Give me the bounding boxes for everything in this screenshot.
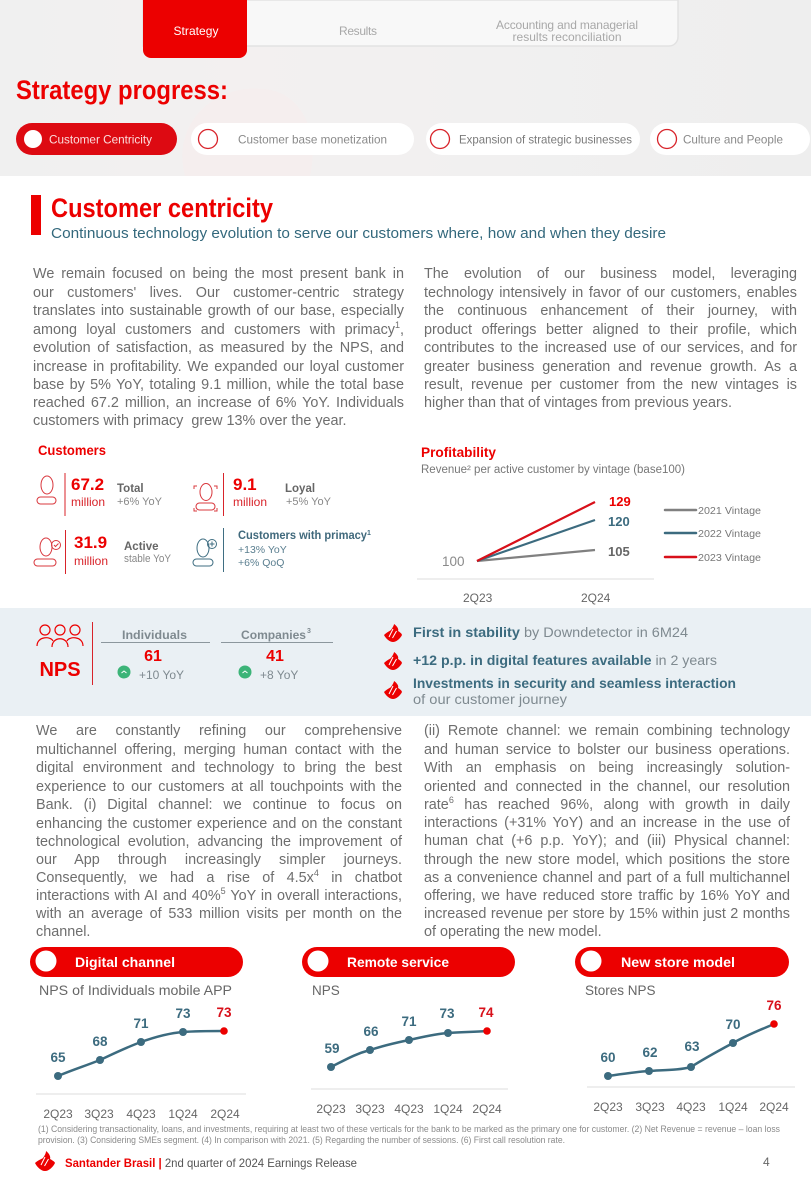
navigation tabs: Results	[339, 24, 377, 38]
icon: person active	[34, 538, 60, 566]
pill: customer base monetization	[191, 123, 414, 155]
page number: 4	[763, 1155, 770, 1169]
text block: intro left column	[33, 266, 404, 429]
line chart: 60	[600, 1050, 616, 1065]
line chart: vintages: 105	[608, 544, 630, 559]
text block: channels left column: channel.	[36, 924, 90, 940]
line chart: vintages: 2Q24	[581, 591, 611, 605]
text block: channels left column: multichannel offering, merging human contact with the	[36, 742, 402, 758]
highlight: security: of our customer journey	[413, 692, 567, 707]
text block: intro right column: The evolution of our business model, leveraging	[424, 266, 797, 282]
header pill	[302, 947, 515, 977]
legend: 2022 Vintage	[698, 528, 761, 540]
highlight: stability: First in stability by Downdetector in 6M24	[413, 625, 689, 640]
footnotes	[38, 1124, 780, 1146]
line chart: 3Q23	[635, 1100, 665, 1114]
text block: intro left column: among loyal customers and customers with primacy1,	[33, 320, 404, 338]
stat: companies: 41	[266, 648, 284, 665]
icon: person total	[37, 476, 56, 504]
pill: customer base monetization: Customer base monetization	[238, 132, 387, 146]
stat: loyal	[223, 473, 332, 516]
text block: channels right column: as a convenience channel and part of a full multichannel	[424, 870, 790, 886]
line chart: 2Q23	[43, 1107, 73, 1121]
pill: customer centricity: Customer Centricity	[49, 132, 152, 146]
text block: intro right column: the continuous enhancement of their journey, with	[424, 303, 797, 319]
panel: digital channel: NPS of Individuals mobile APP	[39, 983, 232, 998]
line chart: 2Q24	[472, 1102, 502, 1116]
header pill: Digital channel	[75, 954, 175, 970]
text block: intro right column	[424, 266, 797, 411]
panel: profitability: Profitability	[421, 444, 496, 460]
text block: channels left column: our App through increasingly simpler journeys.	[36, 852, 402, 868]
pill: customer centricity	[16, 123, 177, 155]
stat: individuals: 61	[144, 648, 162, 665]
stat: total: 67.2	[71, 475, 104, 494]
text block: intro right column: greater business generation and revenue growth. As a	[424, 359, 797, 375]
active tab: strategy: Strategy	[174, 24, 218, 38]
text block: channels right column: rate6 has reached 96%, along with growth in daily	[424, 795, 790, 813]
text block: channels right column: and human service to bolster our business operations.	[424, 742, 790, 758]
stat: total	[64, 473, 163, 516]
text block: channels left column: technological evolution, advancing the improvement of	[36, 834, 402, 850]
stat: active: Active	[124, 541, 159, 553]
stat: active: million	[74, 554, 108, 568]
text block: intro left column: We remain focused on being the most present bank in	[33, 266, 404, 282]
stat: loyal: 9.1	[233, 475, 257, 494]
line chart: vintages	[417, 494, 654, 605]
line chart: 4Q23	[676, 1100, 706, 1114]
text block: intro right column: result, revenue per customer from the new vintages is	[424, 377, 797, 393]
stat: customers with primacy: +13% YoY	[238, 544, 287, 556]
panel: new store model	[575, 947, 795, 1114]
line chart: 66	[363, 1024, 379, 1039]
line chart: 73	[439, 1006, 455, 1021]
line chart: 63	[684, 1039, 700, 1054]
line chart: 65	[50, 1050, 66, 1065]
text block: intro left column: reached 67.2 million, an increase of 6% YoY. Individuals	[33, 395, 404, 411]
header pill	[30, 947, 243, 977]
text block: channels right column	[424, 723, 790, 940]
highlight: security	[413, 676, 736, 707]
footnotes: provision. (3) Considering SMEs segment. (4) In comparison with 2021. (5) Regarding the number of sessions. (6) First call resolution rate.	[38, 1135, 565, 1146]
text block: channels right column: human chat (+6 p.p. YoY); and (iii) Physical channel:	[424, 833, 790, 849]
navigation tabs: Accounting and managerial	[496, 18, 638, 32]
line chart: 74	[478, 1005, 494, 1020]
section heading: customer centricity: Continuous technology evolution to serve our customers where, how and when they desire	[51, 225, 666, 242]
stat: loyal: Loyal	[285, 483, 315, 495]
line chart: 1Q24	[433, 1102, 463, 1116]
legend: 2023 Vintage	[698, 552, 761, 564]
panel: digital channel	[30, 947, 246, 1121]
line chart: 3Q23	[84, 1107, 114, 1121]
text block: intro right column: higher than that of vintages from previous years.	[424, 395, 732, 411]
panel: customers: Customers	[38, 443, 106, 458]
text block: intro left column: evolution of satisfaction, as measured by the NPS, and	[33, 340, 404, 356]
line chart: 73	[216, 1005, 232, 1020]
footer logo and release title	[35, 1151, 357, 1171]
stat: total: Total	[117, 483, 144, 495]
line chart: 76	[766, 998, 782, 1013]
line chart: 73	[175, 1006, 191, 1021]
stat: individuals: +10 YoY	[139, 668, 184, 682]
label: NPS: NPS	[39, 659, 81, 681]
line chart: 2Q24	[210, 1107, 240, 1121]
line chart: 1Q24	[718, 1100, 748, 1114]
text block: channels left column: with an average of 533 million visits per month on the	[36, 906, 402, 922]
line chart: 68	[92, 1034, 108, 1049]
legend	[665, 505, 761, 564]
line chart: 70	[725, 1017, 741, 1032]
text block: intro right column: contributes to the increased use of our services, and for	[424, 340, 797, 356]
panel: remote service	[302, 947, 515, 1116]
line chart: vintages: 120	[608, 514, 630, 529]
line chart: vintages: 100	[442, 554, 465, 569]
header pill: New store model	[621, 954, 735, 970]
text block: intro right column: technology intensively in favor of our customers, enables	[424, 285, 797, 301]
stat: individuals	[101, 628, 210, 682]
stat: individuals: Individuals	[122, 628, 187, 642]
stat: loyal: million	[233, 495, 267, 509]
stat: active: stable YoY	[124, 553, 172, 565]
line chart: vintages: 129	[609, 494, 631, 509]
line chart: 2Q23	[593, 1100, 623, 1114]
text block: intro left column: customers with primacy grew 13% over the year.	[33, 413, 347, 429]
line chart: 3Q23	[355, 1102, 385, 1116]
section heading: customer centricity: Customer centricity	[51, 193, 273, 223]
text block: intro left column: translates into sustainable growth of our base, especially	[33, 303, 404, 319]
line chart: 71	[133, 1016, 149, 1031]
stat: customers with primacy: Customers with primacy	[238, 530, 368, 542]
pill: expansion of strategic businesses	[426, 123, 640, 155]
icon: flame 1	[384, 624, 402, 642]
line chart	[36, 1005, 246, 1121]
line chart	[587, 998, 795, 1114]
icon: person primacy	[193, 539, 216, 566]
stat: companies: +8 YoY	[260, 668, 298, 682]
text block: channels left column	[36, 723, 402, 940]
text block: channels right column: through the new store model, which positions the store	[424, 852, 790, 868]
active tab: strategy	[143, 0, 247, 58]
panel: NPS band	[0, 608, 811, 716]
pill: expansion of strategic businesses: Expansion of strategic businesses	[459, 132, 632, 146]
section heading: customer centricity	[31, 193, 666, 242]
stat: total: million	[71, 495, 105, 509]
header pill: Remote service	[347, 954, 449, 970]
stat: customers with primacy: 1	[367, 530, 371, 537]
navigation tabs	[143, 0, 678, 58]
line chart: 71	[401, 1014, 417, 1029]
highlight: security: Investments in security and seamless interaction	[413, 676, 736, 691]
text block: channels left column: interactions with AI and 40%5 YoY in overall interactions,	[36, 886, 402, 904]
text block: channels right column: of operating the new model.	[424, 924, 602, 940]
stat: customers with primacy: +6% QoQ	[238, 557, 284, 569]
text block: channels left column: Consequently, we had a rise of 4.5x4 in chatbot	[36, 868, 402, 886]
legend: 2021 Vintage	[698, 505, 761, 517]
icon: flame 2	[384, 652, 402, 670]
panel: new store model: Stores NPS	[585, 983, 656, 998]
text block: channels left column: digital environment and technology to bring the best	[36, 760, 402, 776]
text block: channels left column: Bank. (i) Digital channel: we continue to focus on	[36, 797, 402, 813]
line chart: 1Q24	[168, 1107, 198, 1121]
stat: loyal: +5% YoY	[286, 496, 332, 508]
stat: active: 31.9	[74, 533, 107, 552]
stat: companies	[221, 628, 333, 682]
page heading: Strategy progress:	[16, 75, 228, 105]
text block: intro right column: product offerings better aligned to their profile, which	[424, 322, 797, 338]
panel: customers	[34, 443, 371, 574]
text block: channels right column: offering, we have reduced store traffic by 16% YoY and	[424, 888, 790, 904]
text block: channels right column: (ii) Remote channel: we remain combining technology	[424, 723, 790, 739]
line chart: 2Q24	[759, 1100, 789, 1114]
line chart: 62	[642, 1045, 658, 1060]
navigation tabs: results reconciliation	[512, 30, 622, 44]
icon: person loyal	[194, 484, 217, 511]
stat: total: +6% YoY	[117, 496, 163, 508]
text block: channels right column: increased revenue per store by 15% within just 2 months	[424, 906, 790, 922]
line chart: vintages: 2Q23	[463, 591, 493, 605]
panel: profitability: Revenue² per active customer by vintage (base100)	[421, 464, 685, 476]
stat: customers with primacy	[223, 528, 371, 572]
stat: companies: Companies	[241, 628, 306, 642]
footer logo and release title: Santander Brasil | 2nd quarter of 2024 Earnings Release	[65, 1156, 357, 1170]
text block: intro left column: our customers' lives. Our customer-centric strategy	[33, 285, 404, 301]
line chart: 59	[324, 1041, 340, 1056]
line chart: 4Q23	[394, 1102, 424, 1116]
icon: group of people	[37, 625, 83, 647]
panel: remote service: NPS	[312, 983, 340, 998]
panel: profitability	[417, 444, 761, 605]
text block: channels right column: interactions (+31% YoY) and an increase in the use of	[424, 815, 790, 831]
pill: culture and people: Culture and People	[683, 132, 783, 146]
line chart	[311, 1005, 508, 1116]
pill: culture and people	[650, 123, 810, 155]
stat: companies: 3	[307, 628, 311, 635]
text block: channels left column: We are constantly refining our comprehensive	[36, 723, 402, 739]
stat: active	[65, 530, 172, 574]
header background	[0, 0, 811, 176]
header pill	[575, 947, 789, 977]
text block: intro left column: base by 5% YoY, totaling 9.1 million, while the total base	[33, 377, 404, 393]
text block: channels left column: experience to our customers at all touchpoints with the	[36, 779, 402, 795]
icon: flame 3	[384, 681, 402, 699]
line chart: 2Q23	[316, 1102, 346, 1116]
text block: intro left column: increase in profitability. We expanded our loyal customer	[33, 359, 404, 375]
highlight: digital features: +12 p.p. in digital features available in 2 years	[413, 653, 717, 668]
text block: channels right column: With an emphasis on being increasingly solution-	[424, 760, 790, 776]
line chart: 4Q23	[126, 1107, 156, 1121]
text block: channels right column: oriented and connected in the channel, our resolution	[424, 779, 790, 795]
text block: channels left column: enhancing the customer experience and on the constant	[36, 816, 402, 832]
